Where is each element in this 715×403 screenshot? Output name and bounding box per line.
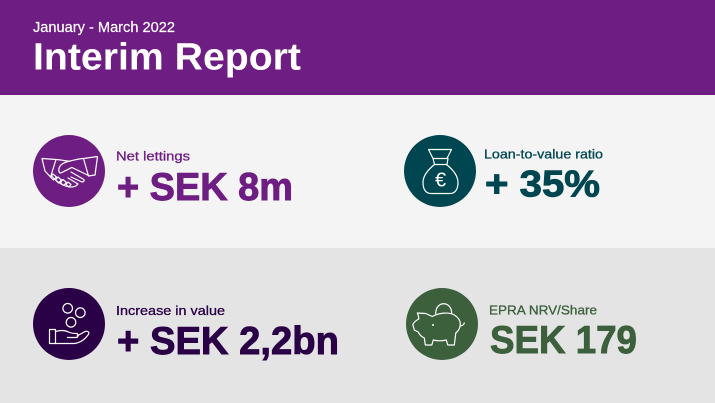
icon: piggy bank: [406, 288, 478, 360]
header banner: [0, 0, 715, 95]
label: Loan-to-value ratio: [484, 146, 603, 162]
report period: January - March 2022: [33, 20, 175, 36]
icon: money bag: €: [435, 170, 446, 192]
icon: coins over hand: [33, 288, 105, 360]
panel: net lettings: [33, 135, 293, 209]
title: Interim Report: [33, 36, 301, 78]
value: + SEK 2,2bn: [117, 320, 339, 363]
icon: handshake: [33, 135, 105, 207]
panel: EPRA NRV per share: [406, 288, 637, 362]
panel: loan-to-value ratio: [404, 135, 603, 207]
label: EPRA NRV/Share: [489, 302, 597, 318]
icon: money bag: [404, 135, 476, 207]
value: + SEK 8m: [117, 166, 293, 209]
value: SEK 179: [490, 319, 637, 362]
label: Increase in value: [116, 303, 225, 318]
label: Net lettings: [116, 148, 191, 164]
panel: increase in value: [33, 288, 339, 363]
value: + 35%: [485, 164, 600, 204]
